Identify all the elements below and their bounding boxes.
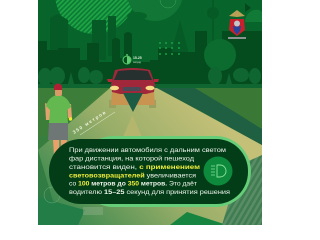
timer label: 15-25 xyxy=(133,56,142,60)
dark diagonal band right xyxy=(157,88,262,145)
right green circle xyxy=(204,39,236,71)
info text: водителю 15–25 секунд для принятия решения xyxy=(69,189,231,196)
info text: При движении автомобиля с дальним светом xyxy=(69,146,226,154)
windshield xyxy=(114,70,152,80)
grille xyxy=(123,87,141,91)
center shadow xyxy=(123,93,143,112)
distance line xyxy=(80,112,115,135)
top ring and shadow xyxy=(127,0,176,20)
upper body xyxy=(111,68,155,94)
pedestrian xyxy=(45,84,72,156)
timer icon: секунд xyxy=(133,61,141,64)
tree line xyxy=(38,67,262,89)
left ground shade xyxy=(38,88,108,136)
info text xyxy=(69,146,231,196)
pill outline xyxy=(78,136,251,207)
city skyline xyxy=(50,0,251,60)
info text: световозвращателей увеличивается xyxy=(69,171,197,179)
distance label: 350 метров xyxy=(72,110,107,135)
green corner right xyxy=(195,88,262,129)
timer icon xyxy=(123,54,142,64)
cloud top right xyxy=(245,10,262,22)
green dots panel xyxy=(159,42,180,55)
pill body xyxy=(49,139,248,204)
lower body xyxy=(111,92,155,105)
light beams xyxy=(38,88,262,225)
reflector xyxy=(69,117,72,121)
striped circle xyxy=(55,0,135,34)
infographic poster xyxy=(38,0,262,225)
dark city band xyxy=(38,31,262,88)
background sky xyxy=(38,0,262,62)
shorts xyxy=(48,122,68,140)
shirt xyxy=(46,95,71,123)
mirrors xyxy=(107,79,159,82)
ground xyxy=(38,88,262,201)
info text: фар дистанция, на которой пешеход xyxy=(69,154,194,162)
cap xyxy=(54,84,62,90)
left headlight xyxy=(110,86,119,90)
head xyxy=(55,90,62,96)
arms xyxy=(45,103,72,120)
beam triangle xyxy=(124,116,142,136)
info text: становится виден, с применением xyxy=(69,164,200,171)
info text: со 100 метров до 350 метров. Это даёт xyxy=(69,181,197,188)
bottom shapes xyxy=(38,155,262,225)
right headlight xyxy=(146,86,154,90)
legs xyxy=(53,140,67,154)
wheels xyxy=(109,100,156,108)
top right circle xyxy=(127,0,183,21)
icon: high beam xyxy=(204,156,232,186)
police emblem xyxy=(228,10,246,39)
car xyxy=(107,68,159,112)
info pill xyxy=(49,136,251,207)
